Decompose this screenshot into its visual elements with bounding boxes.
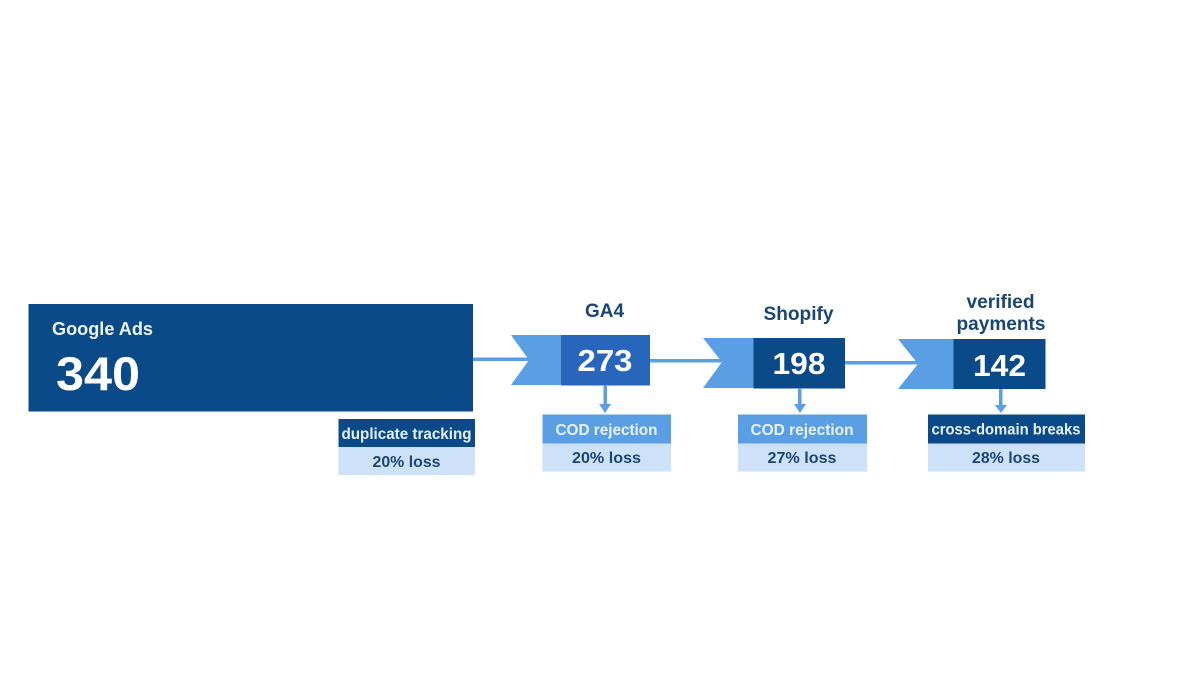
callout: cross-domain breaks: cross-domain breaks — [932, 422, 1081, 438]
callout: COD rejection 20% — [542, 414, 671, 472]
callout: duplicate tracking — [338, 419, 475, 475]
callout: COD rejection 27%: COD rejection — [750, 422, 854, 439]
arrow: Google Ads to GA4 — [473, 358, 531, 361]
callout: COD rejection 20%: COD rejection — [556, 422, 658, 439]
callout: cross-domain breaks: 28% loss — [972, 450, 1040, 467]
stage: verified payments 142 — [898, 339, 1046, 389]
stage: GA4 273 — [511, 335, 650, 386]
arrow: verified payments down to cross-domain breaks — [995, 389, 1007, 413]
arrow: Shopify down to COD rejection — [794, 388, 806, 413]
callout: cross-domain breaks — [928, 414, 1085, 472]
arrow: GA4 to Shopify — [650, 359, 724, 362]
heading: Shopify: Shopify — [764, 304, 834, 325]
heading: verified payments: verified — [966, 292, 1034, 313]
callout: COD rejection 27% — [738, 414, 867, 472]
callout: duplicate tracking: duplicate tracking — [342, 426, 472, 443]
stage: Shopify 198 — [703, 338, 845, 388]
heading: verified payments — [956, 292, 1046, 335]
callout: COD rejection 20%: 20% loss — [572, 450, 641, 467]
callout: duplicate tracking: 20% loss — [372, 454, 441, 471]
label: Google Ads: Google Ads — [52, 319, 153, 339]
panel: Google Ads — [28, 304, 473, 412]
arrow: Shopify to verified payments — [845, 361, 920, 364]
stage: Shopify 198: 198 — [772, 346, 826, 381]
callout: COD rejection 27%: 27% loss — [768, 450, 837, 467]
arrow: GA4 down to COD rejection — [599, 385, 611, 413]
heading: verified payments: payments — [956, 314, 1046, 335]
value: 340: 340 — [56, 347, 140, 400]
stage: GA4 273: 273 — [578, 343, 632, 378]
stage: verified payments 142: 142 — [973, 348, 1026, 383]
heading: GA4: GA4 — [585, 301, 624, 322]
